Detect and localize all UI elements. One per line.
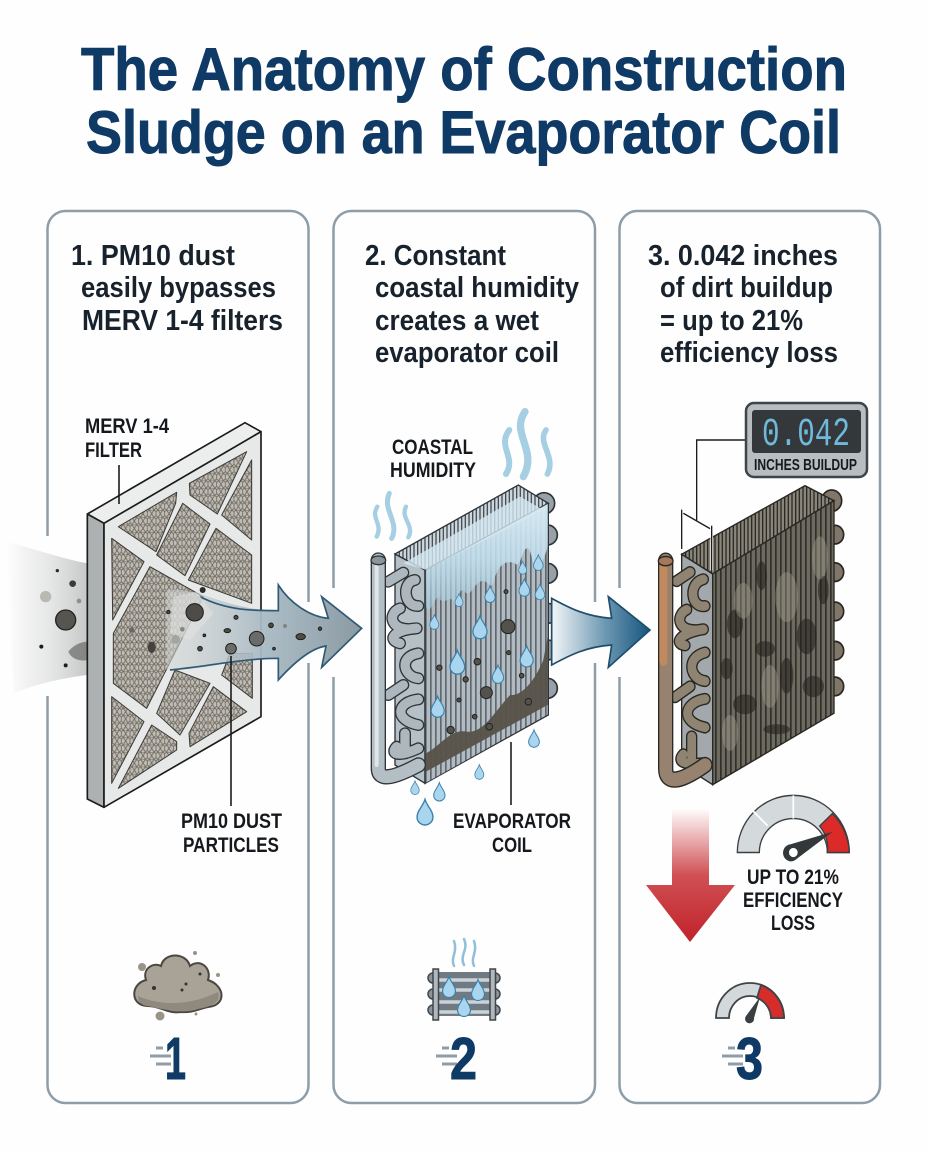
- fin bottoms: [426, 705, 548, 783]
- panel: step 3 border: [620, 211, 880, 1103]
- heading: step 1: MERV 1-4 filters: [82, 305, 283, 337]
- dirt particles: [437, 590, 532, 734]
- heading: step 2: creates a wet: [375, 305, 539, 337]
- number: 2: 2: [450, 1026, 477, 1092]
- arrow: step 2 to step 3: [552, 597, 650, 667]
- heading: step 1: easily bypasses: [81, 272, 276, 304]
- heading: step 3: of dirt buildup: [660, 272, 833, 304]
- digital readout: 0.042 inches buildup: 0.042: [762, 413, 850, 458]
- heading: step 2: coastal humidity: [375, 272, 579, 304]
- filter frame: [87, 423, 261, 807]
- gauge: efficiency loss: [737, 795, 849, 861]
- dirty top fins: [682, 486, 834, 574]
- label: MERV 1-4 filter: FILTER: [85, 439, 142, 462]
- number: 2: [436, 1026, 477, 1092]
- label: MERV 1-4 filter: MERV 1-4: [85, 415, 169, 438]
- illustration: wet evaporator coil: [371, 412, 557, 825]
- label: coastal humidity: HUMIDITY: [390, 459, 476, 482]
- heading: step 3: = up to 21%: [660, 305, 803, 337]
- coil front fins: [425, 503, 548, 783]
- label: up to 21% efficiency loss: LOSS: [771, 912, 815, 935]
- heading: step 2: [365, 240, 579, 369]
- dust on filter: [129, 587, 206, 653]
- incoming dust haze: [7, 542, 88, 693]
- label: MERV 1-4 filter: [85, 415, 169, 504]
- dirty front fins: [713, 501, 834, 785]
- filter mesh cells: [112, 452, 252, 788]
- sludge at coil base: [426, 637, 548, 772]
- digital readout: 0.042 inches buildup: [746, 403, 867, 477]
- label: evaporator coil: COIL: [492, 834, 532, 857]
- icon: dust cloud: [134, 951, 222, 1020]
- illustration: dirty evaporator coil: [658, 440, 844, 785]
- coil back bends: [533, 493, 557, 698]
- coil top fins: [395, 485, 548, 570]
- water film and drips: [426, 504, 548, 610]
- heading: step 3: 3. 0.042 inches: [648, 240, 838, 272]
- label: coastal humidity: COASTAL: [392, 436, 473, 459]
- title: The Anatomy of Construction: [81, 36, 847, 103]
- label: PM10 dust particles: [181, 656, 282, 857]
- water drops on coil: [430, 555, 545, 717]
- label: evaporator coil: [453, 742, 571, 857]
- label: coastal humidity: [390, 436, 476, 482]
- label: PM10 dust particles: PM10 DUST: [181, 810, 282, 833]
- coil left end plate: [395, 554, 425, 783]
- heading: step 2: evaporator coil: [375, 337, 559, 369]
- digital readout: 0.042 inches buildup: INCHES BUILDUP: [754, 457, 857, 474]
- heading: step 2: 2. Constant: [365, 240, 506, 272]
- number: 1: [150, 1026, 186, 1092]
- heading: step 3: [648, 240, 838, 369]
- title: [81, 36, 847, 166]
- illustration: MERV filter with dust stream: [7, 423, 362, 807]
- panel: step 1 border: [48, 211, 308, 1103]
- measurement bracket: [682, 440, 745, 570]
- icon: wet coil: [428, 939, 500, 1020]
- dirty pipes: [658, 556, 705, 780]
- grime blotches: [721, 561, 829, 734]
- humidity wisps: [375, 412, 550, 538]
- panel: step 2 border: [334, 211, 595, 1103]
- label: evaporator coil: EVAPORATOR: [453, 810, 571, 833]
- number: 1: 1: [165, 1026, 186, 1092]
- number: 3: [722, 1026, 763, 1092]
- heading: step 3: efficiency loss: [660, 337, 838, 369]
- label: up to 21% efficiency loss: EFFICIENCY: [743, 889, 843, 912]
- refrigerant pipes: [371, 556, 418, 777]
- label: up to 21% efficiency loss: [743, 866, 843, 935]
- title: Sludge on an Evaporator Coil: [86, 99, 841, 166]
- arrow: efficiency drop: [646, 808, 735, 942]
- air stream arrow: [167, 585, 362, 680]
- heading: step 1: 1. PM10 dust: [71, 240, 235, 272]
- falling water drops: [411, 730, 539, 825]
- dust particles in stream: [167, 604, 322, 654]
- number: 3: 3: [736, 1026, 763, 1092]
- label: PM10 dust particles: PARTICLES: [183, 834, 279, 857]
- label: up to 21% efficiency loss: UP TO 21%: [747, 866, 839, 889]
- icon: small gauge: [716, 983, 784, 1023]
- heading: step 1: [71, 240, 283, 337]
- dirty left plate: [682, 554, 713, 785]
- dirty back bends: [822, 490, 844, 696]
